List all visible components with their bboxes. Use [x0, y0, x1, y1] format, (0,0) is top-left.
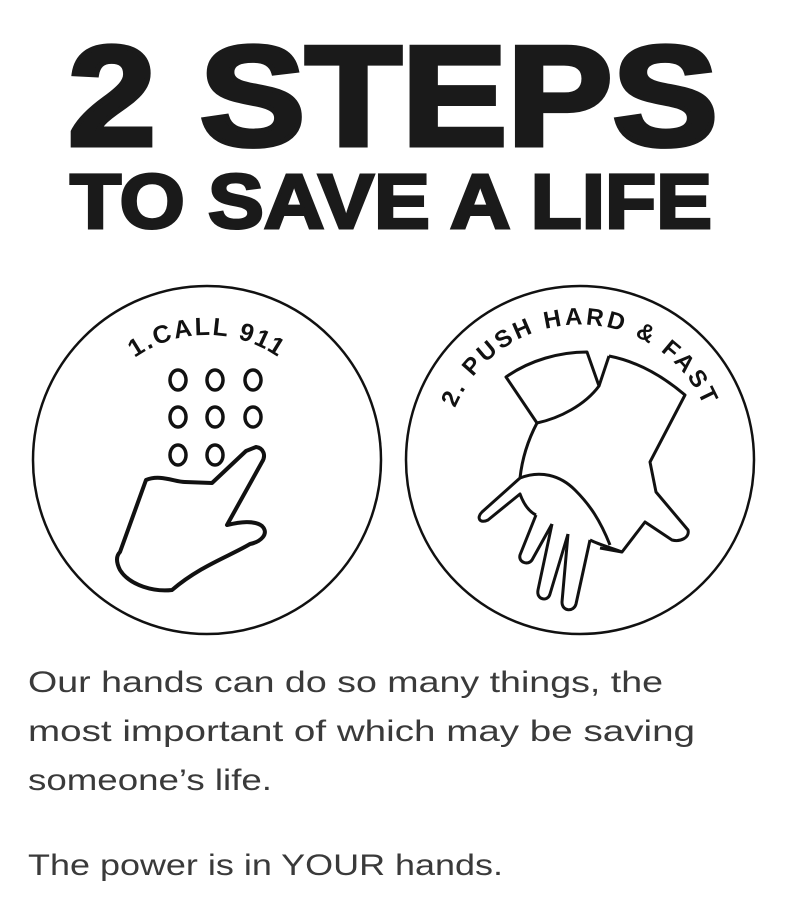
label: push hard & fast: 2. PUSH HARD & FAST: [442, 308, 718, 408]
text block: body: [28, 666, 695, 797]
icon: keypad: [170, 370, 261, 465]
text block: body: someone’s life.: [28, 764, 272, 797]
icon: CPR hands: [479, 352, 688, 610]
text block: body: most important of which may be saving: [28, 715, 695, 748]
panel: push hard & fast: [404, 284, 756, 636]
panel: call 911: [32, 284, 382, 636]
text block: closing: The power is in YOUR hands.: [28, 849, 503, 882]
title: [68, 17, 718, 245]
label: call 911: 1.CALL 911: [128, 318, 283, 357]
title: TO SAVE A LIFE: [70, 159, 712, 245]
text block: body: Our hands can do so many things, the: [28, 666, 663, 699]
title: 2 STEPS: [68, 17, 718, 176]
icon: pointing hand: [117, 447, 265, 590]
